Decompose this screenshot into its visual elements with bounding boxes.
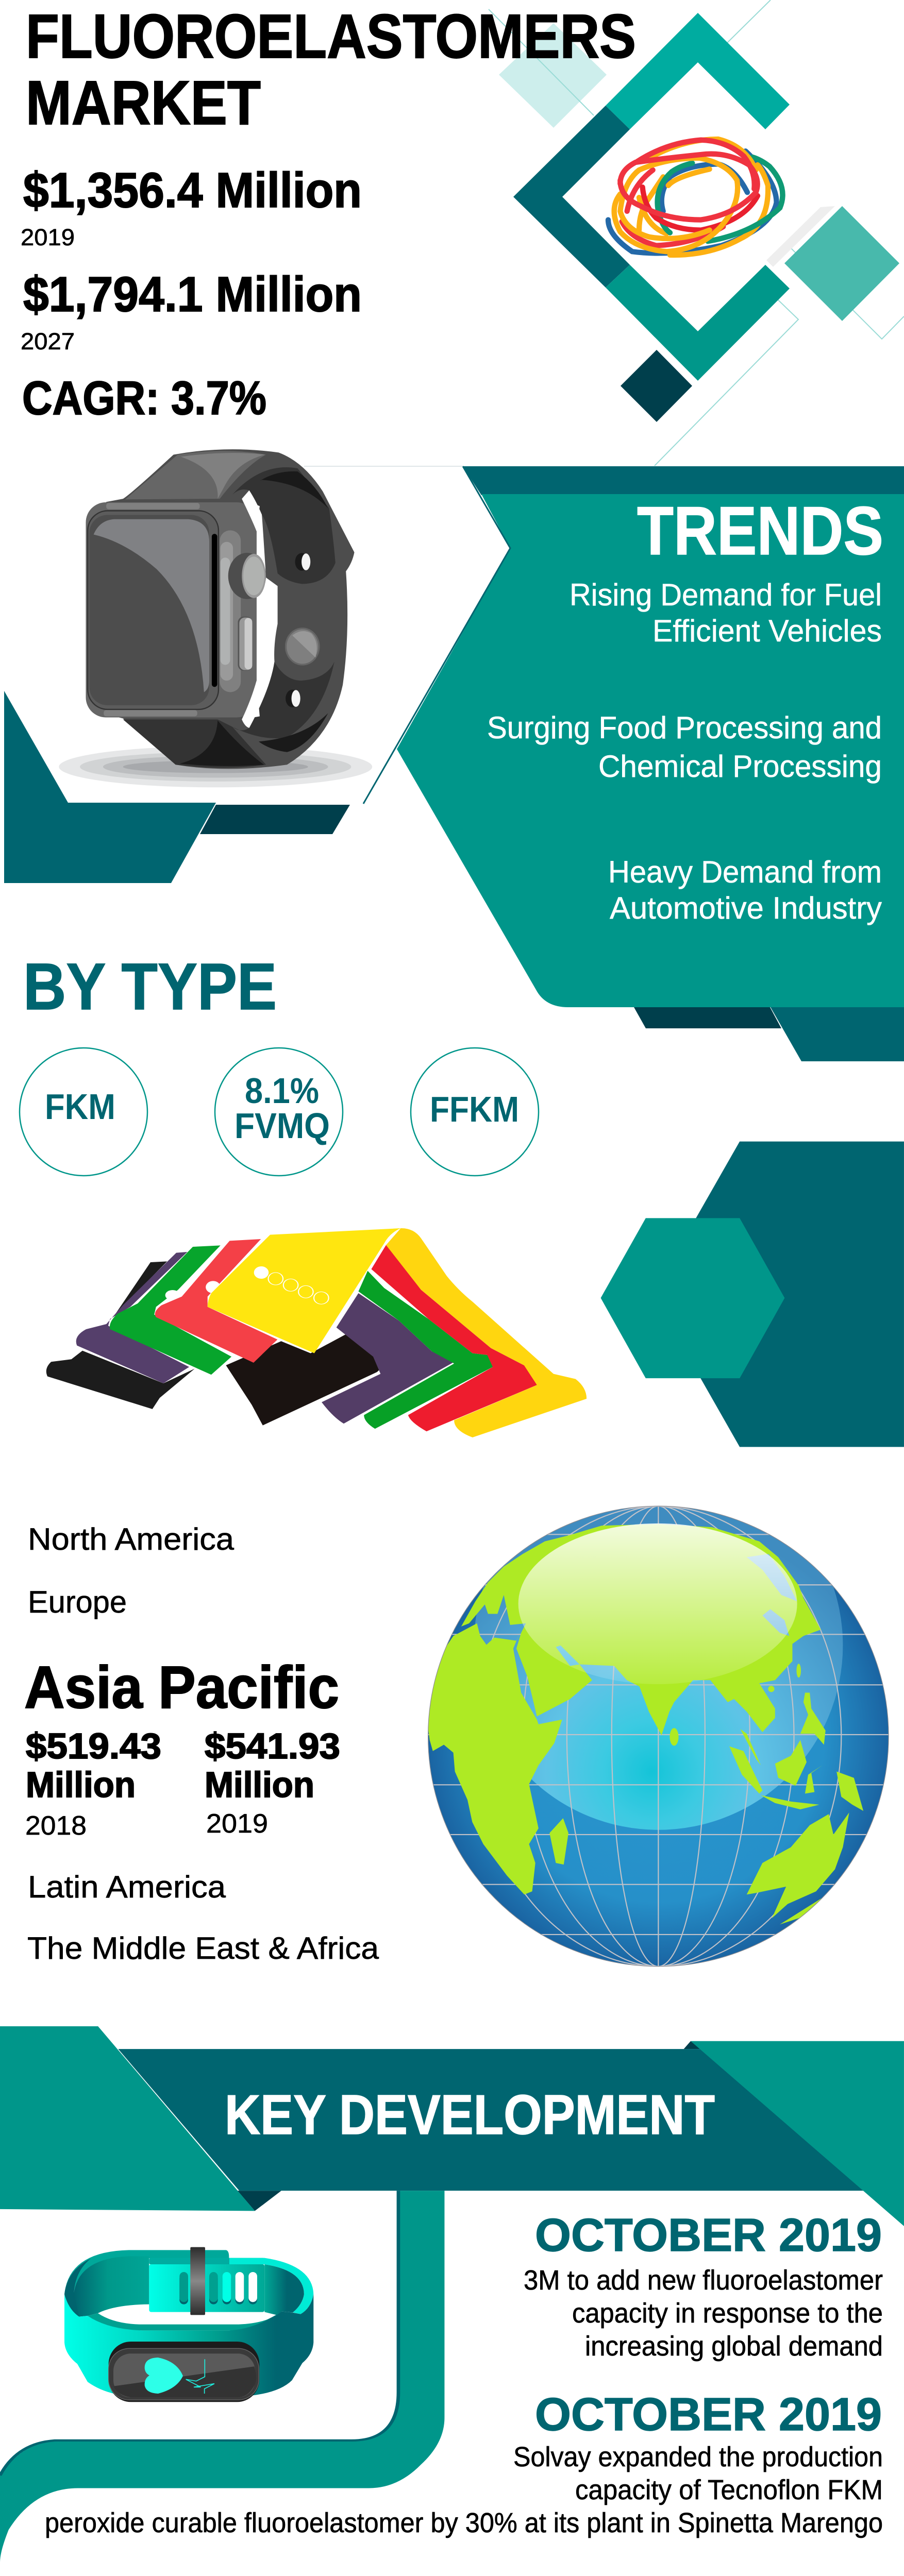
- stat: 2019 value: [21, 163, 362, 250]
- circle: FVMQ: FVMQ: [235, 1106, 330, 1146]
- circle: FFKM: FFKM: [430, 1089, 519, 1129]
- icon: resistance bands: [46, 1228, 587, 1437]
- heading: key development: KEY DEVELOPMENT: [225, 2083, 715, 2146]
- type circles: [20, 1048, 539, 1176]
- region: Middle East and Africa: The Middle East & Africa: [27, 1931, 379, 1965]
- region: Latin America: Latin America: [28, 1870, 226, 1904]
- development 1: [524, 2210, 883, 2362]
- trend item 1: [570, 578, 882, 648]
- stat: 2018 value: $519.43: [26, 1726, 161, 1766]
- panel: trends: [363, 466, 904, 1061]
- stat: 2019 value: $541.93: [205, 1726, 340, 1766]
- stat: 2018 value: 2018: [25, 1811, 87, 1841]
- development 2: [45, 2389, 883, 2538]
- trend item 1: Rising Demand for Fuel: [570, 578, 882, 612]
- stat: CAGR: CAGR: 3.7%: [22, 372, 266, 425]
- trend item 3: [608, 855, 882, 925]
- circle: FKM: [20, 1048, 147, 1176]
- development 1: increasing global demand: [585, 2331, 883, 2362]
- circle: FVMQ: [215, 1048, 343, 1176]
- development 1: OCTOBER 2019: [535, 2210, 882, 2261]
- key development banner: [0, 2026, 904, 2226]
- header graphic: diamonds: [489, 0, 904, 466]
- circle: FVMQ: 8.1%: [245, 1071, 319, 1111]
- stat: 2019 value: 2019: [206, 1809, 268, 1839]
- decorative panel behind watch: [4, 466, 463, 883]
- trend item 2: Surging Food Processing and: [487, 710, 882, 745]
- development 1: 3M to add new fluoroelastomer: [524, 2265, 883, 2296]
- hexagons: [601, 1142, 904, 1447]
- icon: smart watch: [59, 449, 372, 787]
- stat: 2027 value: $1,794.1 Million: [23, 267, 362, 322]
- region: Europe: Europe: [28, 1585, 127, 1619]
- stat: 2019 value: Million: [205, 1765, 314, 1805]
- stat: 2018 value: [25, 1726, 161, 1841]
- circle: FKM: FKM: [45, 1087, 115, 1127]
- trend item 3: Heavy Demand from: [608, 855, 882, 889]
- icon: rubber bands: [608, 139, 783, 255]
- trend item 3: Automotive Industry: [610, 891, 882, 925]
- region: North America: North America: [28, 1522, 235, 1556]
- development 1: capacity in response to the: [572, 2298, 883, 2329]
- icon: fitness band: [64, 2247, 313, 2402]
- development 2: OCTOBER 2019: [535, 2389, 882, 2441]
- circle: FFKM: [411, 1048, 539, 1176]
- stat: 2019 value: 2019: [21, 224, 75, 250]
- stat: 2018 value: Million: [26, 1765, 136, 1805]
- region list: [24, 1522, 379, 1965]
- trend item 2: [487, 710, 882, 784]
- title: MARKET: [26, 67, 261, 138]
- trend item 2: Chemical Processing: [598, 749, 882, 784]
- development 2: Solvay expanded the production: [513, 2442, 883, 2472]
- key developments text: [45, 2210, 883, 2538]
- icon: globe: [425, 1461, 892, 1967]
- trend item 1: Efficient Vehicles: [652, 614, 882, 648]
- curved ribbon: [0, 2191, 444, 2562]
- stat: 2027 value: [21, 267, 362, 354]
- development 2: capacity of Tecnoflon FKM: [575, 2475, 883, 2505]
- title: [26, 1, 636, 138]
- title: FLUOROELASTOMERS: [26, 1, 636, 71]
- stat: 2027 value: 2027: [21, 328, 75, 354]
- region: Asia Pacific: Asia Pacific: [24, 1654, 339, 1721]
- stat: 2019 value: [205, 1726, 340, 1839]
- market value stats: [21, 163, 362, 425]
- heading: by type: BY TYPE: [23, 950, 277, 1024]
- stat: 2019 value: $1,356.4 Million: [23, 163, 362, 218]
